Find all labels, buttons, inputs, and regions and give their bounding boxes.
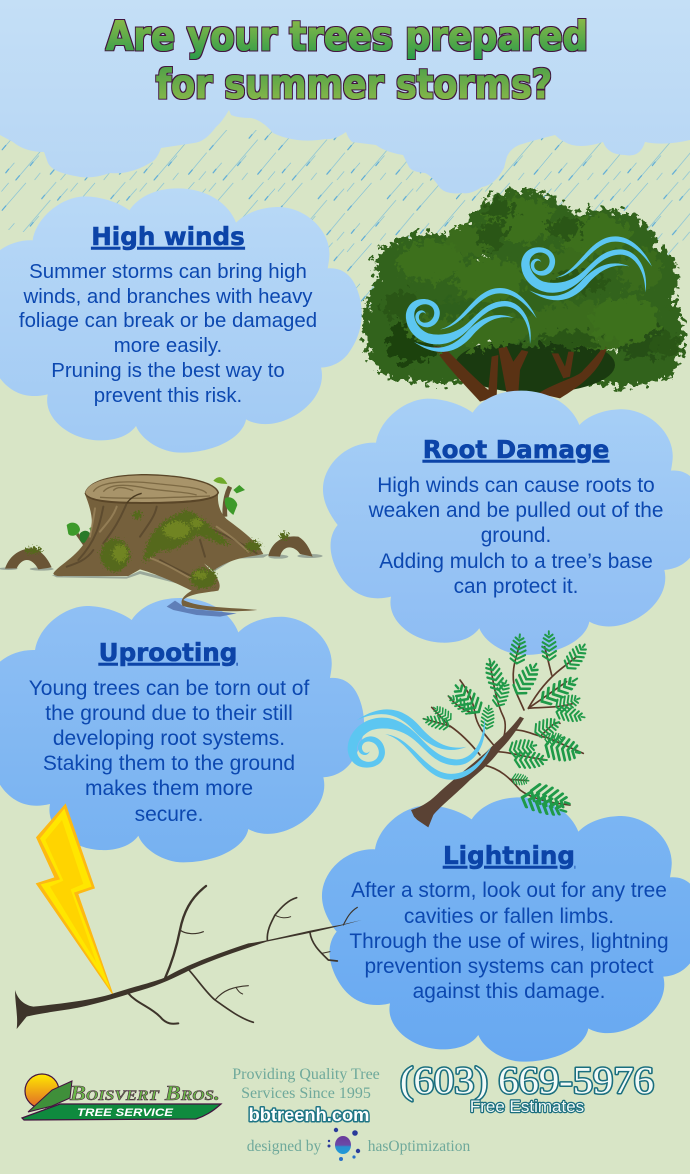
footer: designer credit bbox=[247, 1128, 470, 1161]
body text: against this damage. bbox=[413, 980, 605, 1003]
illustration: lightning bolt bbox=[36, 803, 114, 997]
body text: Staking them to the ground bbox=[43, 752, 295, 775]
small roots bbox=[5, 548, 52, 569]
heading: Root Damage bbox=[423, 435, 609, 464]
title: Are your trees prepared bbox=[106, 14, 588, 60]
body text: cavities or fallen limbs. bbox=[404, 905, 614, 928]
wind swirl bbox=[348, 709, 491, 780]
title: for summer storms? bbox=[156, 62, 552, 108]
illustration: windy tree bbox=[363, 190, 684, 402]
body text bbox=[368, 474, 663, 598]
sun bbox=[25, 1074, 59, 1108]
body text: Summer storms can bring high bbox=[29, 261, 307, 283]
footer: free estimates: Free Estimates bbox=[470, 1097, 584, 1116]
dark understory bbox=[455, 337, 615, 393]
footer: tagline bbox=[232, 1066, 380, 1102]
body text: High winds can cause roots to bbox=[377, 474, 655, 497]
stump top bbox=[85, 474, 219, 504]
footer: phone number: (603) 669-5976 bbox=[400, 1060, 654, 1102]
panel: uprooting bbox=[0, 598, 364, 862]
icon: hasOptimization logo bbox=[328, 1128, 360, 1161]
body text: makes them more bbox=[85, 777, 253, 800]
ground shadows bbox=[0, 554, 323, 589]
body text: Adding mulch to a tree’s base bbox=[379, 550, 653, 573]
leaf fronds bbox=[422, 631, 591, 820]
footer: tagline: Providing Quality Tree bbox=[232, 1066, 380, 1083]
footer: company logo: Boisvert Bros. bbox=[69, 1081, 220, 1105]
illustration: broken branch with wind bbox=[348, 631, 591, 827]
body text bbox=[349, 879, 669, 1003]
body text: ground. bbox=[481, 524, 551, 547]
heading: Lightning bbox=[443, 841, 575, 870]
body text bbox=[19, 261, 317, 407]
body text: Pruning is the best way to bbox=[51, 360, 285, 382]
illustration: moss-covered stump bbox=[0, 474, 323, 617]
body text: winds, and branches with heavy bbox=[22, 286, 313, 308]
body text: developing root systems. bbox=[53, 727, 285, 750]
trunk bbox=[411, 717, 524, 827]
footer: company logo: TREE SERVICE bbox=[77, 1107, 174, 1119]
heading: High winds bbox=[91, 222, 245, 251]
twigs bbox=[423, 643, 583, 805]
body text: more easily. bbox=[114, 335, 222, 357]
body text: the ground due to their still bbox=[45, 702, 293, 725]
body text: weaken and be pulled out of the bbox=[368, 499, 663, 522]
body text: prevention systems can protect bbox=[364, 955, 654, 978]
body text: can protect it. bbox=[454, 575, 578, 598]
panel: high winds bbox=[0, 188, 362, 453]
panel: lightning bbox=[322, 797, 690, 1062]
footer: designer credit: designed by bbox=[247, 1138, 321, 1155]
footer: company logo bbox=[22, 1074, 221, 1120]
trunks bbox=[433, 342, 609, 402]
moss bbox=[25, 510, 289, 588]
rain bbox=[1, 130, 690, 308]
wind swirls bbox=[406, 236, 652, 352]
storm cloud sky bbox=[0, 0, 690, 193]
banner bbox=[22, 1104, 221, 1120]
title bbox=[106, 14, 588, 108]
body text: secure. bbox=[135, 803, 203, 826]
body text bbox=[29, 677, 309, 826]
sprout leaves bbox=[67, 477, 245, 545]
illustration: struck dead branch bbox=[15, 886, 362, 1029]
panel: root damage bbox=[323, 391, 690, 655]
trunk body bbox=[53, 492, 263, 611]
footer: tagline: Services Since 1995 bbox=[241, 1085, 371, 1102]
body text: Through the use of wires, lightning bbox=[349, 930, 669, 953]
body text: After a storm, look out for any tree bbox=[351, 879, 667, 902]
body text: foliage can break or be damaged bbox=[19, 310, 317, 332]
footer: website: bbtreenh.com bbox=[249, 1104, 369, 1125]
body text: prevent this risk. bbox=[94, 385, 242, 407]
heading: Uprooting bbox=[99, 638, 237, 667]
bark shading bbox=[67, 503, 257, 587]
body text: Young trees can be torn out of bbox=[29, 677, 309, 700]
footer: designer credit: hasOptimization bbox=[368, 1138, 470, 1155]
leaf swoosh bbox=[28, 1081, 72, 1112]
